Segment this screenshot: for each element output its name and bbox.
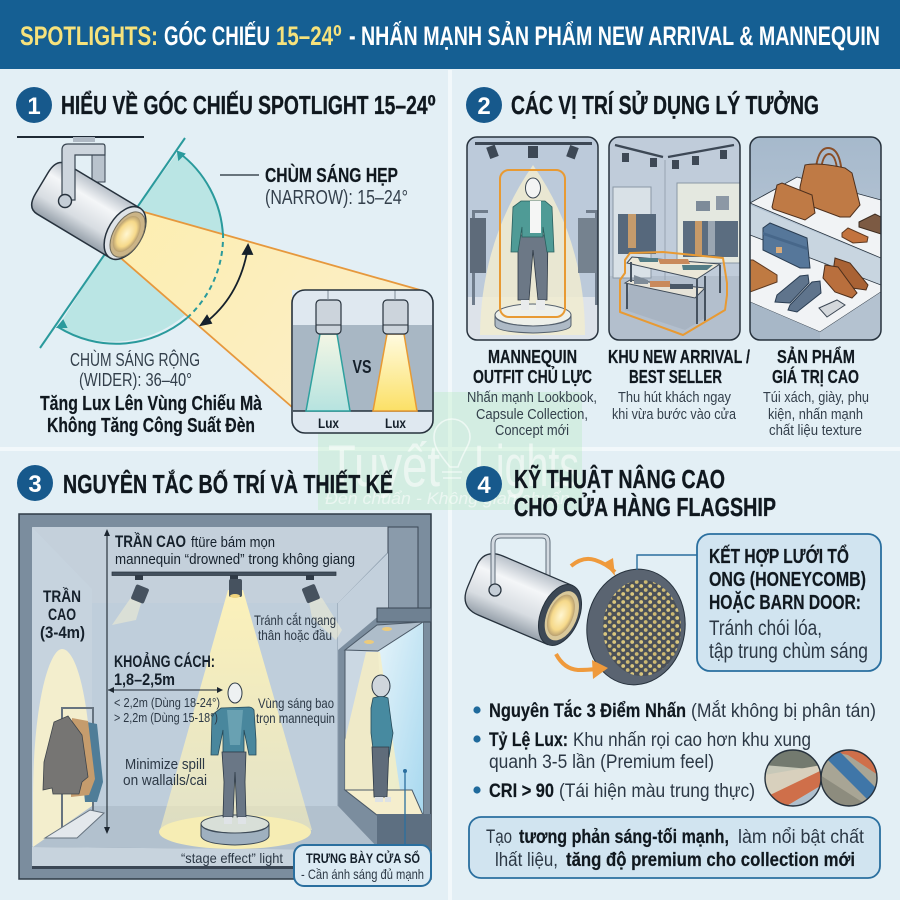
heading 4: CHO CỬA HÀNG FLAGSHIP [514, 491, 776, 522]
conclusion box: Tạo [486, 827, 512, 848]
title banner: SPOTLIGHTS: [20, 21, 158, 51]
heading 3 [17, 465, 393, 501]
callout: window display: - Cần ánh sáng đủ mạnh [301, 866, 424, 882]
panel 2: ideal positions [466, 87, 881, 439]
bullet list: Khu nhấn rọi cao hơn khu xung [573, 730, 811, 751]
text: benefit [40, 393, 263, 437]
wide beam fan [40, 138, 223, 348]
bullet list: Nguyên Tắc 3 Điểm Nhấn [489, 700, 686, 722]
room text labels: on wallails/cai [123, 772, 207, 789]
room text labels: mannequin “drowned” trong không giang [115, 551, 355, 568]
clothes rack [43, 708, 104, 838]
callout: window display [294, 845, 431, 886]
watermark: Đèn chuẩn - Không gian chuẩn [325, 489, 570, 508]
comparison inset [292, 290, 433, 433]
card: high value products [750, 137, 881, 340]
caption: mannequin: Nhấn mạnh Lookbook, [467, 389, 597, 406]
label narrow: (NARROW): 15–24° [265, 187, 408, 209]
heading 3: NGUYÊN TẮC BỐ TRÍ VÀ THIẾT KẾ [63, 469, 393, 499]
room text labels: > 2,2m (Dùng 15-18°) [114, 710, 218, 725]
icon: spotlight with honeycomb [459, 536, 693, 691]
text: benefit: Tăng Lux Lên Vùng Chiếu Mà [40, 393, 263, 415]
room text labels: Tránh cắt ngang [254, 612, 336, 628]
bullet list: (Tái hiện màu trung thực) [559, 781, 755, 802]
caption: mannequin: Capsule Collection, [476, 406, 588, 423]
fabric swatches [764, 749, 878, 807]
card: mannequin [467, 137, 598, 340]
callout: window display: TRƯNG BÀY CỬA SỔ [306, 849, 420, 866]
caption: new arrival: BEST SELLER [629, 367, 722, 387]
heading 1: 1 [27, 93, 41, 120]
room illustration [19, 514, 431, 879]
window display [345, 622, 431, 866]
heading 2: 2 [477, 93, 491, 120]
caption: high value [763, 346, 869, 439]
icon: track spotlight [17, 137, 155, 267]
conclusion box: làm nổi bật chất [738, 827, 865, 848]
heading 4: KỸ THUẬT NÂNG CAO [514, 464, 725, 494]
caption: high value: GIÁ TRỊ CAO [772, 366, 859, 387]
room text labels: TRẦN [43, 587, 81, 606]
beams [33, 590, 342, 849]
caption: new arrival: Thu hút khách ngay [618, 389, 731, 406]
conclusion box: tăng độ premium cho collection mới [566, 850, 855, 871]
title banner [0, 0, 900, 69]
comparison inset: VS [352, 357, 372, 377]
caption: mannequin [467, 347, 597, 439]
room text labels: (3-4m) [40, 623, 85, 642]
caption: new arrival [608, 347, 750, 423]
watermark [318, 392, 582, 510]
conclusion box: lhất liệu, [495, 850, 558, 871]
bullet list [473, 700, 876, 802]
label narrow [220, 163, 408, 209]
bullet list: CRI > 90 [489, 781, 554, 802]
caption: mannequin: Concept mới [495, 422, 569, 439]
callout: honeycomb [637, 534, 881, 671]
caption: new arrival: KHU NEW ARRIVAL / [608, 347, 750, 367]
caption: high value: SẢN PHẨM [777, 346, 855, 367]
panel 1: beam angle [16, 87, 436, 437]
room text labels: ftüre bám mọn [191, 534, 275, 551]
title banner: GÓC CHIẾU [164, 20, 270, 51]
room text labels: Vùng sáng bao [258, 695, 334, 711]
callout: honeycomb: ONG (HONEYCOMB) [709, 569, 866, 591]
bullet list: quanh 3-5 lần (Premium feel) [489, 752, 714, 773]
room text labels: thân hoặc đầu [258, 627, 332, 643]
panel 3: layout principles [17, 465, 431, 886]
heading 2 [466, 87, 819, 123]
heading 3: 3 [28, 471, 42, 498]
panel 4: advanced techniques [459, 464, 881, 878]
room text labels [40, 532, 355, 866]
caption: high value: chất liệu texture [769, 422, 862, 439]
heading 4 [466, 464, 776, 522]
label wide: CHÙM SÁNG RỘNG [70, 349, 200, 370]
caption: mannequin: MANNEQUIN [488, 347, 577, 367]
room text labels: < 2,2m (Dùng 18-24°) [114, 695, 220, 710]
text: benefit: Không Tăng Công Suất Đèn [47, 415, 255, 437]
caption: new arrival: khi vừa bước vào cửa [612, 406, 737, 423]
conclusion box [469, 817, 880, 878]
angle arrow [201, 245, 252, 325]
callout: honeycomb: HOẶC BARN DOOR: [709, 591, 861, 614]
title banner: 15–24⁰ [276, 21, 342, 51]
heading 1: HIỂU VỀ GÓC CHIẾU SPOTLIGHT 15–24⁰ [61, 90, 436, 120]
caption: high value: kiện, nhấn mạnh [768, 406, 863, 423]
room text labels: “stage effect” light [181, 850, 283, 866]
card: new arrival [609, 137, 740, 340]
room text labels: trọn mannequin [256, 710, 335, 726]
heading 4: 4 [477, 472, 491, 499]
callout: honeycomb: Tránh chói lóa, [709, 617, 822, 640]
callout: honeycomb: KẾT HỢP LƯỚI TỔ [709, 544, 849, 568]
room text labels: TRẦN CAO [115, 532, 186, 551]
dimension arrows [104, 529, 223, 834]
watermark: Tuyết [328, 434, 440, 499]
conclusion box: tương phản sáng-tối mạnh, [519, 827, 729, 848]
bullet list: (Mắt không bị phân tán) [691, 700, 876, 722]
mannequin [201, 683, 269, 845]
caption: mannequin: OUTFIT CHỦ LỰC [473, 366, 592, 387]
caption: high value: Túi xách, giày, phụ [763, 389, 869, 406]
label narrow: CHÙM SÁNG HẸP [265, 163, 398, 187]
room text labels: Minimize spill [125, 756, 205, 773]
narrow beam [115, 208, 420, 407]
room text labels: CAO [48, 605, 76, 624]
room text labels: KHOẢNG CÁCH: [114, 652, 215, 671]
track and fixtures [112, 572, 336, 604]
label wide [70, 349, 200, 390]
watermark: Lights [474, 434, 579, 499]
comparison inset: Lux [385, 415, 406, 431]
heading 1 [16, 87, 436, 123]
bullet list: Tỷ Lệ Lux: [489, 730, 568, 751]
callout: honeycomb: tập trung chùm sáng [709, 640, 868, 663]
comparison inset: Lux [318, 415, 339, 431]
room text labels: 1,8–2,5m [114, 670, 175, 689]
label wide: (WIDER): 36–40° [79, 370, 192, 390]
